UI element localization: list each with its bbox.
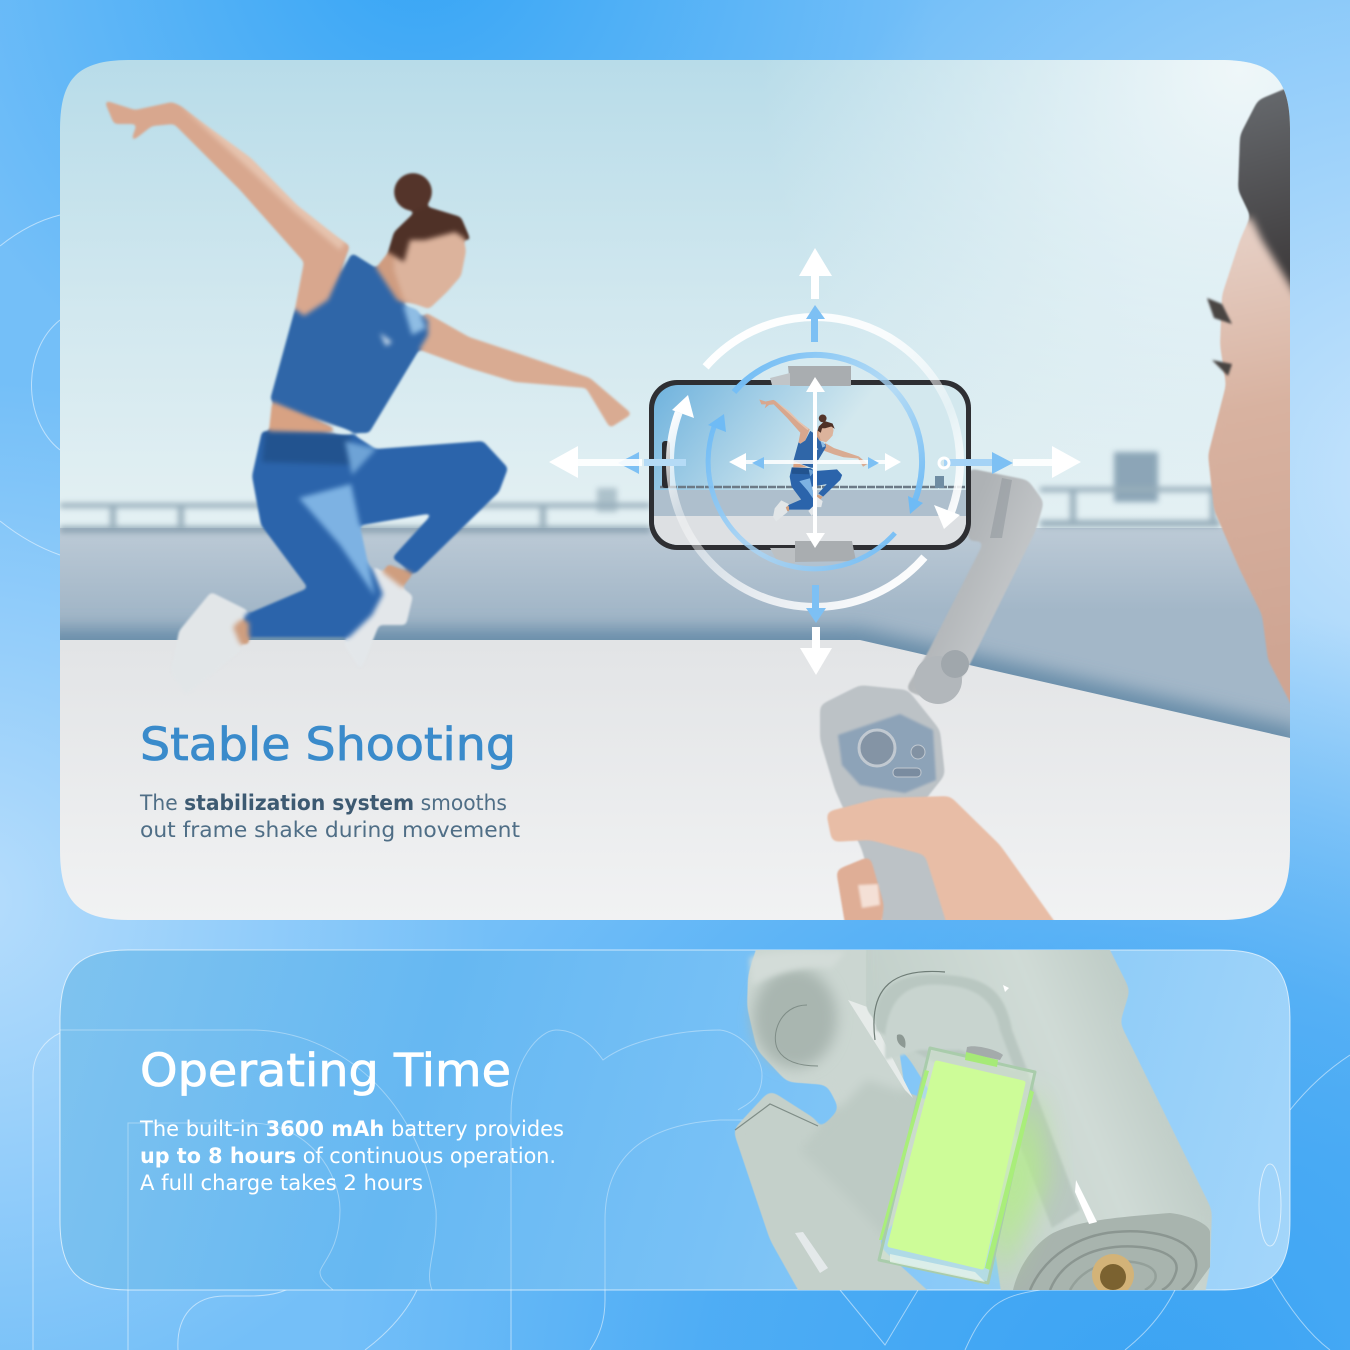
gimbal arm: [905, 468, 1044, 705]
text: battery description: [139, 1117, 564, 1195]
gimbal handle and hand: [820, 685, 1054, 920]
eyelashes: [1207, 298, 1232, 376]
directional axis arrows: [549, 248, 1081, 675]
heading: operating time: Operating Time: [140, 1044, 511, 1097]
blurred face in the foreground: [1208, 88, 1290, 704]
text: stabilization description: [139, 791, 520, 842]
battery: [879, 1046, 1035, 1283]
text: stabilization description: out frame shake during movement: [140, 818, 520, 842]
decorative outlines inside the card: [60, 1030, 1281, 1290]
text: battery description: A full charge takes 2 hours: [140, 1171, 423, 1195]
text: battery description: The built-in 3600 mAh battery provides: [139, 1117, 564, 1141]
jumping dancer: [104, 100, 632, 695]
text: stabilization description: The stabilization system smooths: [139, 791, 507, 815]
gimbal handle with battery: [734, 950, 1212, 1290]
stabilisation rotation rings: [670, 317, 960, 607]
rooftop background scene: [40, 60, 1300, 920]
text: battery description: up to 8 hours of continuous operation.: [140, 1144, 556, 1168]
phone on gimbal: [649, 366, 971, 563]
heading: stable shooting: Stable Shooting: [140, 718, 516, 771]
panel: stable shooting photo card: [40, 60, 1330, 950]
panel: operating time card: [60, 950, 1290, 1290]
